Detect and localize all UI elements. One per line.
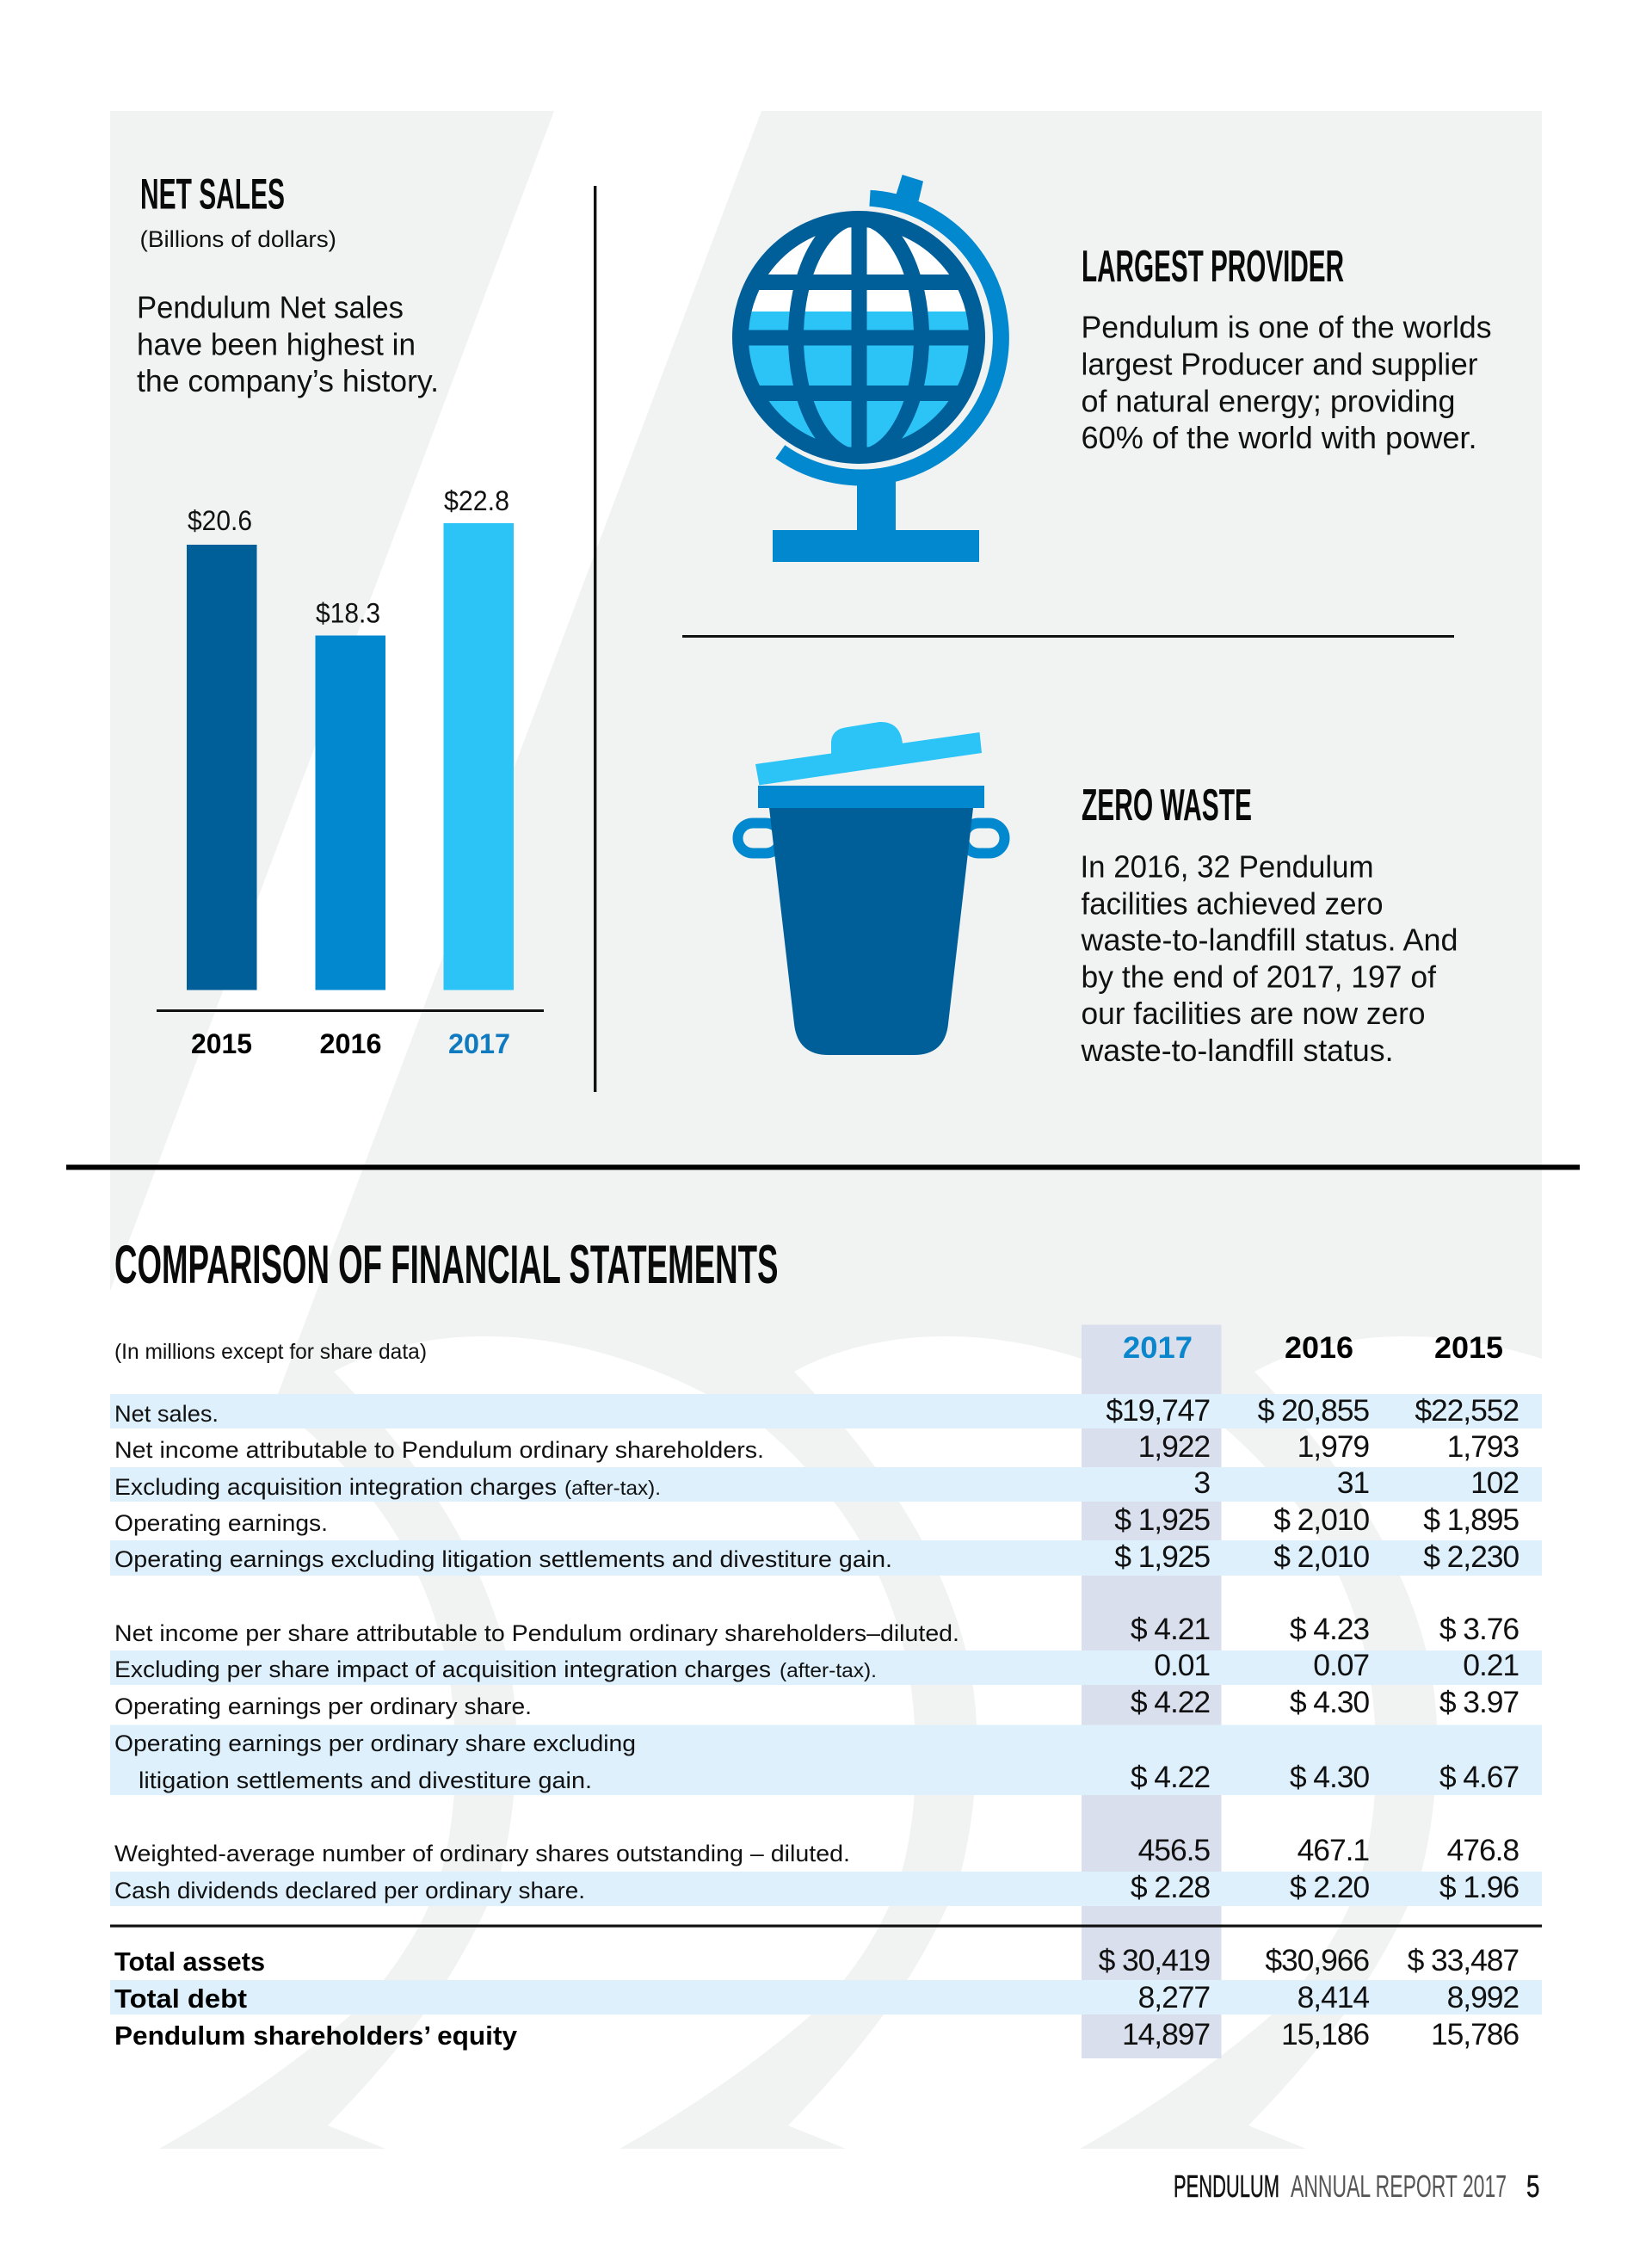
row labels: Total assets xyxy=(114,1946,265,1977)
2016 values: $ 4.23 xyxy=(1290,1612,1369,1646)
table header: 2016 xyxy=(1285,1331,1353,1365)
2015 values: $ 33,487 xyxy=(1408,1943,1519,1977)
row labels: Operating earnings excluding litigation settlements and divestiture gain. xyxy=(114,1546,892,1572)
2017 values: 1,922 xyxy=(1138,1429,1210,1464)
body: zero waste: waste-to-landfill status. And xyxy=(1081,922,1458,957)
description text xyxy=(137,289,439,398)
2016 values: $ 4.30 xyxy=(1290,1760,1369,1794)
alternating row bands xyxy=(110,1394,1542,2014)
row labels: Net income attributable to Pendulum ordinary shareholders. xyxy=(114,1437,764,1463)
2017 values xyxy=(1099,1393,1210,2051)
2016 values: 0.07 xyxy=(1313,1648,1369,1682)
2017 values: $ 4.21 xyxy=(1131,1612,1210,1646)
table header: 2017 xyxy=(1123,1331,1193,1365)
bar chart xyxy=(157,485,544,1059)
bar chart: 2017 xyxy=(448,1028,510,1059)
description text: Pendulum Net sales xyxy=(137,289,404,325)
row labels: Total debt xyxy=(114,1983,247,2014)
footer: PENDULUM xyxy=(1174,2169,1279,2204)
2015 values: $22,552 xyxy=(1415,1393,1519,1428)
bar chart: 2015 xyxy=(191,1028,252,1059)
2016 values: $ 2,010 xyxy=(1273,1502,1369,1537)
body: zero waste: facilities achieved zero xyxy=(1081,886,1384,921)
bar chart: $20.6 xyxy=(188,505,252,536)
highlighted 2017 column xyxy=(1082,1325,1222,2058)
2017 values: 456.5 xyxy=(1138,1833,1210,1867)
text block: zero waste xyxy=(1081,780,1458,1068)
row labels: Weighted-average number of ordinary shares outstanding – diluted. xyxy=(114,1841,850,1866)
body: largest provider: of natural energy; providing xyxy=(1081,384,1456,418)
table header: (In millions except for share data) xyxy=(114,1340,427,1364)
2016 values: $30,966 xyxy=(1265,1943,1369,1977)
table header xyxy=(114,1331,1503,1365)
financial table xyxy=(110,1325,1542,2058)
bar chart: 2016 xyxy=(320,1028,382,1059)
2017 values: $ 4.22 xyxy=(1131,1685,1210,1719)
row labels: Cash dividends declared per ordinary share. xyxy=(114,1878,585,1903)
footer: ANNUAL REPORT 2017 xyxy=(1291,2169,1507,2204)
heading: largest provider: LARGEST PROVIDER xyxy=(1082,242,1344,292)
2016 values: $ 2.20 xyxy=(1290,1870,1369,1904)
body: zero waste: by the end of 2017, 197 of xyxy=(1081,959,1437,995)
2017 values: $ 1,925 xyxy=(1114,1502,1210,1537)
body: largest provider: Pendulum is one of the worlds xyxy=(1081,310,1492,344)
row labels: Operating earnings per ordinary share excluding xyxy=(114,1731,636,1756)
2016 values xyxy=(1258,1393,1369,2051)
2015 values: 1,793 xyxy=(1447,1429,1519,1464)
2017 values: 14,897 xyxy=(1122,2017,1210,2051)
row labels: Pendulum shareholders’ equity xyxy=(114,2020,518,2051)
2015 values: $ 1,895 xyxy=(1423,1502,1519,1537)
2015 values: $ 2,230 xyxy=(1423,1539,1519,1574)
2015 values: $ 3.97 xyxy=(1439,1685,1519,1719)
2017 values: 0.01 xyxy=(1154,1648,1210,1682)
footer xyxy=(1174,2169,1540,2204)
body: zero waste: our facilities are now zero xyxy=(1081,996,1425,1031)
2016 values: 1,979 xyxy=(1298,1429,1369,1464)
2016 values: $ 20,855 xyxy=(1258,1393,1369,1428)
body: zero waste: In 2016, 32 Pendulum xyxy=(1081,848,1373,885)
heading: zero waste: ZERO WASTE xyxy=(1082,780,1252,830)
2015 values: $ 3.76 xyxy=(1439,1612,1519,1646)
2016 values: $ 2,010 xyxy=(1273,1539,1369,1574)
row labels: Net sales. xyxy=(114,1401,219,1427)
row labels: Net income per share attributable to Pendulum ordinary shareholders–diluted. xyxy=(114,1620,959,1646)
row labels: Operating earnings. xyxy=(114,1510,328,1536)
2017 values: $ 1,925 xyxy=(1114,1539,1210,1574)
row labels: litigation settlements and divestiture gain. xyxy=(139,1768,592,1793)
heading: net sales: NET SALES xyxy=(140,170,285,219)
bar chart: $22.8 xyxy=(444,485,509,516)
2015 values: 476.8 xyxy=(1447,1833,1519,1867)
body: largest provider: 60% of the world with power. xyxy=(1081,420,1476,455)
2015 values: 0.21 xyxy=(1463,1648,1519,1682)
description text: the company’s history. xyxy=(137,363,439,398)
body: zero waste: waste-to-landfill status. xyxy=(1081,1033,1394,1068)
row labels: Operating earnings per ordinary share. xyxy=(114,1694,532,1719)
body: zero waste xyxy=(1081,848,1458,1068)
row labels: Excluding per share impact of acquisition integration charges xyxy=(114,1656,771,1682)
2015 values: 8,992 xyxy=(1447,1980,1519,2014)
text block: largest provider xyxy=(1081,242,1492,455)
2017 values: $ 4.22 xyxy=(1131,1760,1210,1794)
2016 values: 8,414 xyxy=(1298,1980,1369,2014)
2016 values: 31 xyxy=(1337,1465,1369,1500)
2016 values: 15,186 xyxy=(1281,2017,1369,2051)
panel: net sales xyxy=(137,170,544,1059)
icon: globe xyxy=(731,175,1001,562)
bar chart: $18.3 xyxy=(316,597,380,628)
2017 values: $ 30,419 xyxy=(1099,1943,1210,1977)
icon: trash bin xyxy=(738,722,1005,1055)
2015 values: 15,786 xyxy=(1431,2017,1519,2051)
body: largest provider: largest Producer and supplier xyxy=(1081,346,1478,382)
footer: 5 xyxy=(1526,2169,1540,2204)
2017 values: $ 2.28 xyxy=(1131,1870,1210,1904)
row labels xyxy=(114,1401,959,2051)
description text: have been highest in xyxy=(137,327,416,361)
2017 values: $19,747 xyxy=(1106,1393,1210,1428)
row labels: (after-tax). xyxy=(780,1659,877,1681)
2016 values: 467.1 xyxy=(1298,1833,1369,1867)
row labels: (after-tax). xyxy=(564,1477,661,1499)
row labels: Excluding acquisition integration charges xyxy=(114,1474,557,1500)
unit note: (Billions of dollars) xyxy=(139,226,336,252)
heading: comparison of financial statements: COMPARISON OF FINANCIAL STATEMENTS xyxy=(114,1235,778,1295)
table header: 2015 xyxy=(1434,1331,1503,1365)
2016 values: $ 4.30 xyxy=(1290,1685,1369,1719)
2017 values: 8,277 xyxy=(1138,1980,1210,2014)
2017 values: 3 xyxy=(1193,1465,1210,1500)
2015 values: $ 4.67 xyxy=(1439,1760,1519,1794)
2015 values: $ 1.96 xyxy=(1439,1870,1519,1904)
2015 values: 102 xyxy=(1470,1465,1519,1500)
2015 values xyxy=(1408,1393,1519,2051)
body: largest provider xyxy=(1081,310,1492,455)
